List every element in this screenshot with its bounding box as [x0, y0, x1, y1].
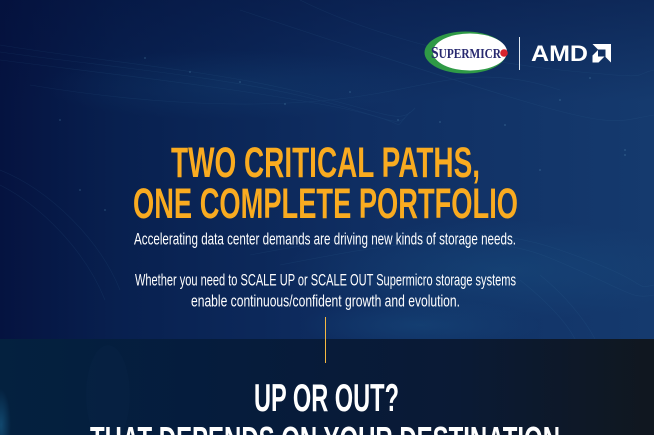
title: [133, 139, 518, 228]
intro text block: [134, 230, 516, 310]
panel: dark lower band: [0, 339, 654, 435]
icon: AMD arrow: [592, 44, 611, 62]
connector line: [325, 317, 326, 363]
logo: AMD: AMD: [531, 41, 588, 66]
logo: AMD: [531, 41, 611, 66]
section heading: [90, 377, 560, 435]
divider between logos: [519, 37, 520, 70]
logo: Supermicro: [424, 32, 508, 74]
section heading: UP OR OUT?: [254, 377, 399, 420]
intro text block: enable continuous/confident growth and evolution.: [191, 292, 460, 310]
title: TWO CRITICAL PATHS,: [171, 139, 480, 187]
logo: Supermicro: SUPERMICR: [431, 43, 502, 62]
